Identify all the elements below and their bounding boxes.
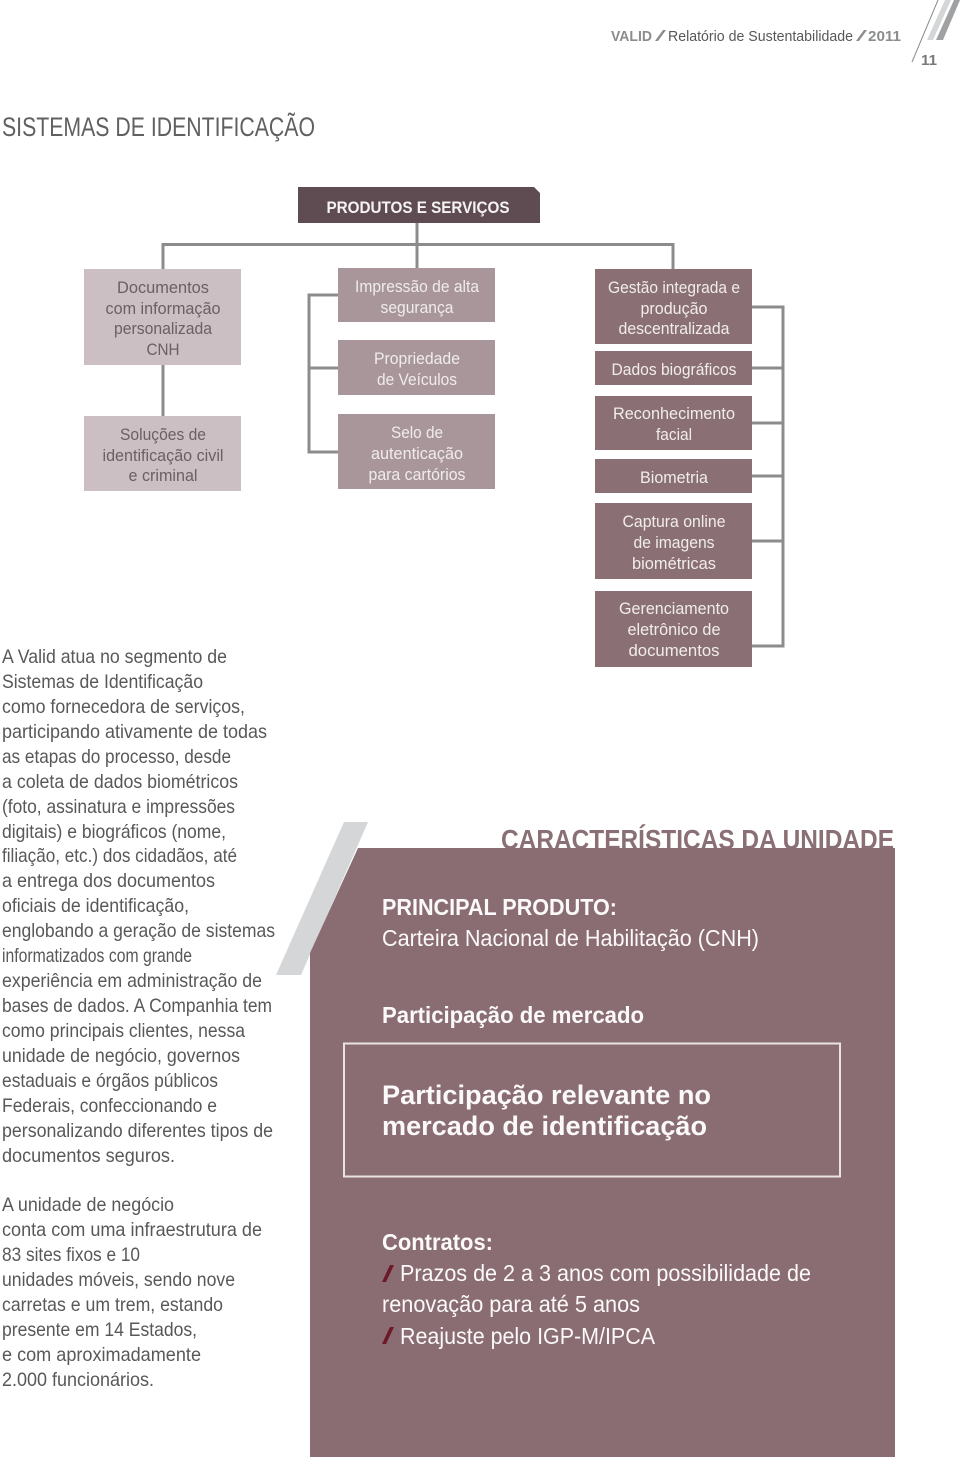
heading box: produtos e serviços: PRODUTOS E SERVIÇOS [326,199,510,217]
text block: infraestrutura: carretas e um trem, estando [2,1294,223,1316]
column: gestão: documentos [628,642,720,660]
text block: segmento de sistemas de identificação: as etapas do processo, desde [2,746,231,768]
column: documentos: Soluções de [120,426,206,444]
column: gestão [595,269,752,667]
column: impressão: de Veículos [377,371,457,389]
text block: infraestrutura: 83 sites fixos e 10 [2,1244,140,1266]
text block: infraestrutura: 2.000 funcionários. [2,1369,154,1391]
contratos: Prazos de 2 a 3 anos com possibilidade de [400,1260,811,1286]
running header [611,29,901,45]
contratos: renovação para até 5 anos [382,1291,640,1317]
text block: segmento de sistemas de identificação: experiência em administração de [2,970,262,992]
text block: segmento de sistemas de identificação: oficiais de identificação, [2,895,189,917]
text block: segmento de sistemas de identificação: como principais clientes, nessa [2,1020,245,1042]
column: gestão: eletrônico de [628,621,720,639]
contratos [382,1229,811,1349]
column: gestão: Reconhecimento [613,405,735,423]
text block: segmento de sistemas de identificação: filiação, etc.) dos cidadãos, até [2,845,237,867]
column: documentos [84,269,241,491]
icon: corner slashes [912,0,960,62]
title: SISTEMAS DE IDENTIFICAÇÃO [2,111,315,142]
text block: segmento de sistemas de identificação: documentos seguros. [2,1145,175,1167]
column: gestão: Gestão integrada e [608,279,740,297]
column: gestão: de imagens [634,534,714,552]
principal produto [382,894,759,951]
page number: 11 [921,53,937,69]
column: gestão: Captura online [622,513,726,531]
column: impressão [338,268,495,489]
column: impressão: Selo de [391,424,443,442]
text block: segmento de sistemas de identificação: a coleta de dados biométricos [2,771,238,793]
running header: Relatório de Sustentabilidade [668,29,853,45]
text block: segmento de sistemas de identificação: Sistemas de Identificação [2,671,203,693]
text block: infraestrutura: A unidade de negócio [2,1194,174,1216]
column: impressão: para cartórios [368,466,466,484]
text block: segmento de sistemas de identificação: personalizando diferentes tipos de [2,1120,273,1142]
contratos: Contratos: [382,1229,493,1255]
text block: segmento de sistemas de identificação: bases de dados. A Companhia tem [2,995,272,1017]
column: gestão: descentralizada [618,320,730,338]
column: gestão: produção [640,300,708,318]
column: documentos: Documentos [117,279,209,297]
text block: segmento de sistemas de identificação: unidade de negócio, governos [2,1045,240,1067]
column: documentos: CNH [146,341,180,359]
text block: infraestrutura [2,1194,262,1391]
participação de mercado heading: Participação de mercado [382,1002,644,1028]
column: impressão: segurança [380,299,454,317]
text block: segmento de sistemas de identificação: participando ativamente de todas [2,721,267,743]
column: impressão: autenticação [371,445,463,463]
text block: segmento de sistemas de identificação: Federais, confeccionando e [2,1095,217,1117]
column: documentos: identificação civil [102,447,224,465]
column: documentos: com informação [106,300,220,318]
text block: infraestrutura: conta com uma infraestrutura de [2,1219,262,1241]
column: gestão: Dados biográficos [612,361,736,379]
column: documentos: personalizada [114,320,213,338]
text block: segmento de sistemas de identificação: estaduais e órgãos públicos [2,1070,218,1092]
running header: VALID [611,29,652,45]
org chart [84,187,783,667]
chart connectors [163,223,783,646]
column: impressão: Propriedade [374,350,460,368]
column: gestão: facial [656,426,692,444]
text block: segmento de sistemas de identificação: informatizados com grande [2,945,192,967]
callout: participação relevante: Participação relevante no [382,1080,711,1110]
text block: infraestrutura: e com aproximadamente [2,1344,201,1366]
heading box: produtos e serviços [298,187,540,223]
principal produto: PRINCIPAL PRODUTO: [382,894,617,920]
text block: segmento de sistemas de identificação [2,646,275,1167]
column: gestão: biométricas [632,555,716,573]
text block: segmento de sistemas de identificação: (foto, assinatura e impressões [2,796,235,818]
text block: segmento de sistemas de identificação: digitais) e biográficos (nome, [2,821,226,843]
text block: segmento de sistemas de identificação: A Valid atua no segmento de [2,646,227,668]
contratos: Reajuste pelo IGP-M/IPCA [400,1323,656,1349]
callout: participação relevante: mercado de identificação [382,1111,707,1141]
text block: infraestrutura: unidades móveis, sendo nove [2,1269,235,1291]
decorative large slash [276,822,368,975]
column: impressão: Impressão de alta [355,278,480,296]
text block: infraestrutura: presente em 14 Estados, [2,1319,197,1341]
column: gestão: Gerenciamento [619,600,729,618]
column: documentos: e criminal [128,467,198,485]
panel heading: características da unidade: CARACTERÍSTICAS DA UNIDADE [501,824,894,855]
text block: segmento de sistemas de identificação: como fornecedora de serviços, [2,696,245,718]
principal produto: Carteira Nacional de Habilitação (CNH) [382,925,759,951]
text block: segmento de sistemas de identificação: englobando a geração de sistemas [2,920,275,942]
panel: características da unidade [310,848,895,1457]
text block: segmento de sistemas de identificação: a entrega dos documentos [2,870,215,892]
running header: 2011 [868,29,901,45]
column: gestão: Biometria [640,469,709,487]
callout: participação relevante [344,1044,840,1176]
